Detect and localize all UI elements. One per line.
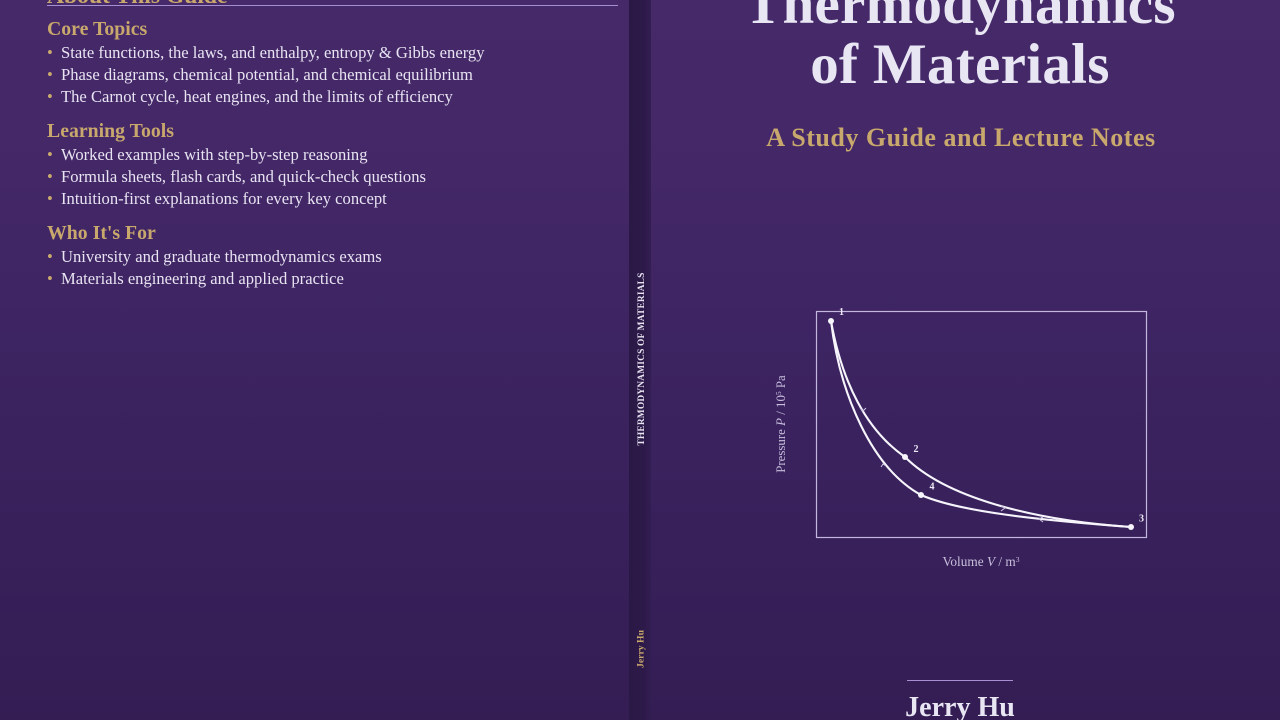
list: learning tools xyxy=(47,145,426,208)
direction arrows xyxy=(860,408,1043,522)
state points xyxy=(828,318,1134,530)
x axis label: 3 xyxy=(1016,555,1020,564)
list: learning tools: Formula sheets, flash cards, and quick-check questions xyxy=(61,167,426,186)
list: who it's for: • xyxy=(47,247,53,266)
subtitle: A Study Guide and Lecture Notes xyxy=(766,122,1156,152)
list: core topics: Phase diagrams, chemical potential, and chemical equilibrium xyxy=(61,65,473,84)
title: of Materials xyxy=(810,33,1110,96)
spine author: Jerry Hu xyxy=(636,630,646,668)
point labels: 4 xyxy=(930,482,934,492)
list: learning tools: Intuition-first explanations for every key concept xyxy=(61,189,387,208)
title xyxy=(744,0,1176,96)
list: learning tools: • xyxy=(47,145,53,164)
y axis label: 5 xyxy=(774,391,783,395)
spine title: THERMODYNAMICS OF MATERIALS xyxy=(636,272,646,446)
point labels xyxy=(839,307,1144,524)
heading: who it's for: Who It's For xyxy=(47,222,156,244)
list: core topics: • xyxy=(47,65,53,84)
list: learning tools: • xyxy=(47,167,53,186)
heading: core topics: Core Topics xyxy=(47,18,147,40)
author rule xyxy=(907,680,1013,681)
point labels: 3 xyxy=(1139,514,1144,524)
panel: back cover xyxy=(47,0,485,288)
list: who it's for xyxy=(47,247,382,288)
heading: learning tools: Learning Tools xyxy=(47,120,174,142)
list: core topics: The Carnot cycle, heat engines, and the limits of efficiency xyxy=(61,87,453,106)
x axis label: Volume V / m xyxy=(942,554,1016,569)
panel: spine xyxy=(629,0,651,720)
chart: Carnot cycle P-V diagram xyxy=(774,307,1148,569)
cycle curves xyxy=(831,321,1131,527)
list: core topics: • xyxy=(47,87,53,106)
list: who it's for: Materials engineering and applied practice xyxy=(61,269,344,288)
list: who it's for: • xyxy=(47,269,53,288)
list: core topics xyxy=(47,43,485,106)
plot frame xyxy=(816,312,1146,538)
list: core topics: State functions, the laws, and enthalpy, entropy & Gibbs energy xyxy=(61,43,485,62)
point labels: 2 xyxy=(914,444,918,455)
list: learning tools: Worked examples with step-by-step reasoning xyxy=(61,145,368,164)
y axis label: Pressure P / 10 xyxy=(774,395,788,473)
panel: front cover xyxy=(744,0,1176,152)
point labels: 1 xyxy=(839,307,844,318)
list: core topics: • xyxy=(47,43,53,62)
y axis label: Pa xyxy=(774,375,788,391)
list: who it's for: University and graduate thermodynamics exams xyxy=(61,247,382,266)
list: learning tools: • xyxy=(47,189,53,208)
